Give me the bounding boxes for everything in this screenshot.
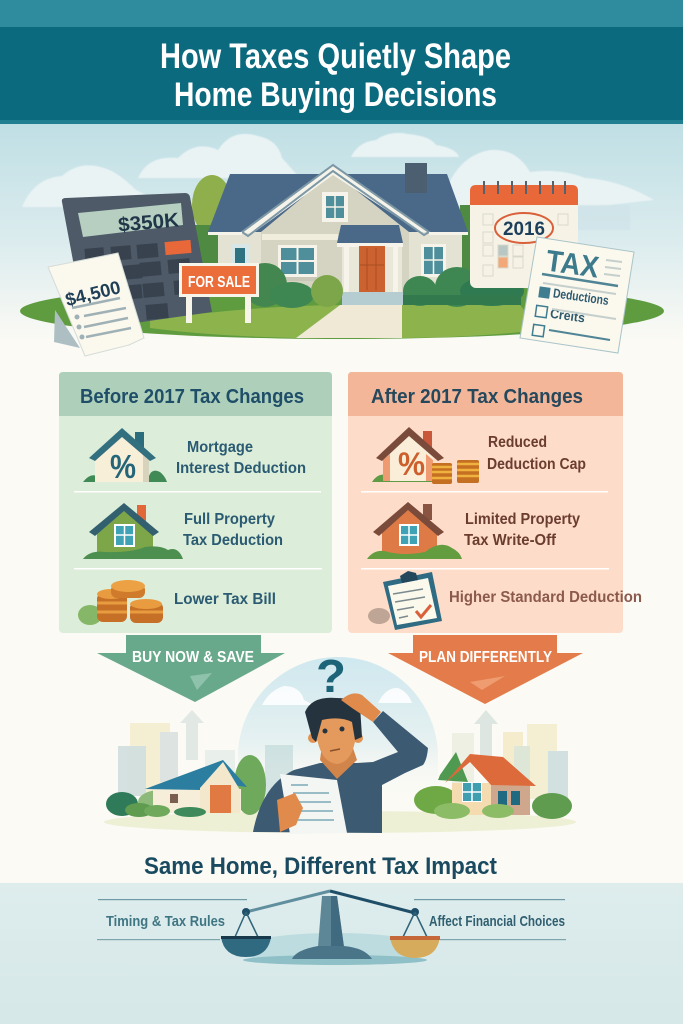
chimney [405,163,427,193]
footer band [0,883,683,1024]
panel: before 2017 [59,372,332,633]
calculator: $350K [117,209,180,237]
text: full property tax deduction: Full Property [184,511,275,528]
ground [104,811,576,833]
person head [305,693,381,764]
hero lawn [20,283,664,339]
left pan [221,937,271,957]
question mark: ? [316,650,346,702]
arrow: buy now and save [97,635,285,702]
right pan [390,937,440,958]
header banner [0,0,683,124]
text: reduced deduction cap: Reduced [488,434,547,451]
door [359,246,385,292]
calendar grid [483,214,568,276]
document held [280,774,347,834]
icon: percent house with coins: % [398,446,425,482]
tax document [520,237,634,353]
lower hand [277,793,303,832]
text: full property tax deduction [183,511,283,549]
icon: percent house: % [110,448,136,485]
clouds [22,133,654,230]
shrubs [243,263,524,308]
tax document: Creits [549,306,586,325]
arrow: plan differently: PLAN DIFFERENTLY [419,649,552,666]
calendar: 2016 [503,219,545,240]
text: limited property tax write-off: Tax Write-Off [464,532,557,549]
heading: after: After 2017 Tax Changes [371,385,583,408]
panel: after 2017 [348,372,642,633]
text: reduced deduction cap [487,434,586,473]
receipt [48,253,144,356]
for sale sign [179,263,259,323]
hero sky [0,124,683,340]
icon: clipboard [368,571,442,630]
person body [253,711,428,833]
calendar [470,181,578,288]
tax document: TAX [544,245,601,285]
balance scale [221,891,440,965]
calculator [62,193,212,330]
trees behind house [192,175,480,290]
raised hand [341,693,381,722]
right window [421,244,446,277]
top window [322,192,348,222]
title: Home Buying Decisions [174,76,497,114]
footpath [296,305,402,338]
icon: percent house [83,428,167,485]
checkbox list [538,286,551,299]
text: higher standard deduction: Higher Standard Deduction [449,589,642,606]
tax document: Deductions [552,285,610,308]
text: mortgage interest deduction: Interest Deduction [176,460,306,477]
calculator keys [84,243,195,320]
text: full property tax deduction: Tax Deduction [183,532,283,549]
icon: coin stacks [78,580,163,625]
small side window [231,244,249,264]
rules and captions [97,899,566,940]
text: lower tax bill: Lower Tax Bill [174,591,276,608]
title [160,37,511,114]
for sale sign: FOR SALE [188,274,250,291]
title: How Taxes Quietly Shape [160,37,511,76]
heading: before: Before 2017 Tax Changes [80,385,304,408]
text: mortgage interest deduction: Mortgage [187,439,253,456]
text: reduced deduction cap: Deduction Cap [487,456,586,473]
skyline left [118,710,293,796]
arrow: buy now and save: BUY NOW & SAVE [132,649,254,666]
left window [278,245,317,277]
receipt: $4,500 [63,276,123,310]
icon: green house [83,503,183,559]
text: limited property tax write-off: Limited Property [465,511,580,528]
icon: percent house with coins [372,427,479,484]
house [208,163,468,292]
text: mortgage interest deduction [176,439,306,477]
text: limited property tax write-off [464,511,580,549]
scene: person deciding [104,650,576,834]
arrow: plan differently [388,635,583,704]
heading: same home: Same Home, Different Tax Impact [144,853,497,880]
text: timing and tax rules: Timing & Tax Rules [106,913,225,930]
left small house [106,755,266,817]
right small house [414,752,572,819]
porch [342,243,402,292]
skyline right [452,710,568,799]
icon: orange house [367,502,462,559]
text: affect financial choices: Affect Financial Choices [429,913,565,930]
dome clouds [262,686,314,705]
